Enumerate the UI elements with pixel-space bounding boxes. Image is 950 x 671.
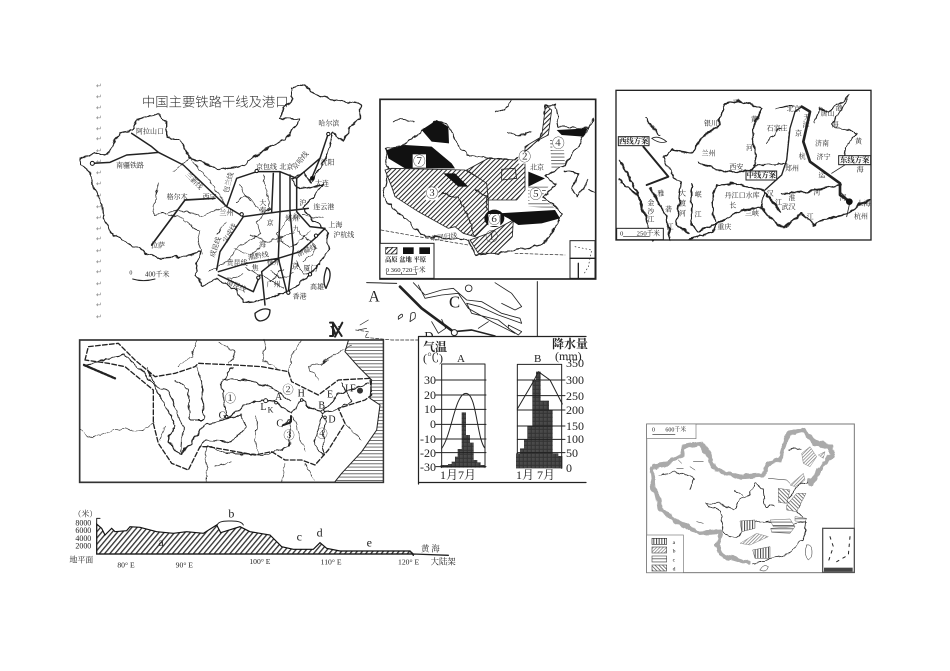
panel: China crop regions map [647,424,854,573]
Hanjiang bold line [84,365,115,378]
railway and port labels: 徐 [293,211,300,220]
place labels: 杭 [799,151,806,160]
railway and port labels: 大连 [315,179,329,188]
railway and port labels: 大 [259,198,266,207]
place labels: 河 [746,143,753,152]
letter C: C [449,292,460,311]
month labels: 1月 [516,468,534,482]
railway and port labels: 浙赣线 [295,241,318,258]
paragraph marks column: ↵ [96,192,102,200]
place labels: 岷 [695,190,702,199]
scale box: 250千米 [637,229,660,238]
place labels: 江 [695,210,702,219]
place labels: 江 [667,222,674,231]
inset South China Sea [823,528,854,572]
railway and port labels: 阿拉山口 [136,127,164,136]
terrain letters: c [297,530,302,544]
railway and port labels: 高雄 [310,282,324,291]
paragraph marks column: ↵ [96,125,102,133]
sea and shelf labels: 黄 海 [421,544,440,554]
temperature axis title: (℃) [423,351,443,365]
paragraph marks column: ↵ [96,235,102,243]
temperature tick labels: 10 [424,402,436,416]
railway and port labels: 宝成线 [221,222,239,244]
railway and port labels: 兰州 [219,208,233,217]
eastern route [802,107,850,202]
scale bar: 0 [129,270,132,276]
inset South China Sea [570,241,595,278]
railway and port labels: 400千米 [145,269,169,278]
place labels: 长 [729,202,736,210]
paragraph marks column: ↵ [96,291,102,299]
railway and port labels: 厦门 [303,263,317,272]
month labels: 1月 [440,468,458,482]
scale box: 0 [652,428,655,434]
temperature tick labels [420,373,436,474]
sea and shelf labels: 大陆架 [431,557,456,567]
railway and port labels: 湘黔线 [247,249,269,262]
place labels: 兰州 [702,149,716,158]
axis labels: 2000 [75,542,91,551]
railway and port labels: 沪杭线 [333,230,354,239]
country border gray band [652,430,832,563]
place labels: 津 [803,120,810,129]
place labels: 西安 [729,162,743,171]
place labels: 京 [795,129,802,138]
place labels: 海 [832,119,839,128]
chart B bars and curve [516,364,565,468]
temperature axis title [423,339,447,365]
scale bar [129,270,155,281]
railway lines [92,133,328,305]
place labels: 河 [839,193,846,202]
numbered region labels: ③ [426,187,439,201]
legend: c [673,558,676,564]
longitude labels: 100° E [249,557,271,566]
axis labels: 4000 [75,534,91,543]
terrain letters [158,506,372,550]
labels: D [328,415,336,426]
coastline and rivers [660,448,807,563]
terrain letters: b [228,506,234,520]
precipitation axis title: 降水量 [552,336,588,351]
panel: railway map [80,85,360,321]
place labels: 运 [818,172,826,180]
place labels: 江 [647,215,654,224]
paragraph marks column: ↵ [96,280,102,288]
China outline [80,85,360,302]
precipitation tick labels: 150 [566,419,584,433]
precipitation axis title: (mm) [555,349,582,363]
labels: F [350,384,356,395]
main river [83,355,368,453]
route label boxes: 西线方案 [619,137,649,146]
month labels: 7月 [458,468,476,482]
scale box [617,228,663,240]
title: 中国主要铁路干线及港口 [142,94,289,109]
labels [219,384,356,430]
paragraph marks column: ↵ [96,93,102,101]
place labels [647,103,871,231]
legend box: 0 360 720千米 [386,265,426,274]
railway and port labels: 南疆铁路 [116,161,144,170]
railway and port labels: 武 [277,235,284,244]
scale box [647,424,696,439]
railway and port labels: 九 [293,224,300,233]
axis labels: 地平面 [69,555,93,565]
railway and port labels: 沈阳 [321,157,335,166]
longitude labels [117,557,419,569]
longitude labels: 90° E [176,560,193,569]
legend: d [673,567,676,573]
precipitation tick labels: 200 [566,403,584,417]
paragraph marks column: ↵ [96,247,102,255]
tropic of cancer [381,230,565,255]
symbol V: V [330,324,341,341]
paragraph marks column: ↵ [96,214,102,222]
paragraph marks column: ↵ [96,104,102,112]
railway and port labels: 沪 [299,198,306,207]
place labels: 金 [647,198,654,207]
legend [647,535,683,573]
letter D: D [424,330,433,344]
region and place labels: 北京 [530,162,544,171]
precipitation axis title [552,336,588,363]
scale box: 0 [620,231,624,238]
labels: L [260,402,266,413]
numbered region labels: ④ [552,136,565,150]
railway and port labels: 格尔木 [167,192,188,201]
railway and port labels: 广州 [267,279,281,288]
paragraph marks column: ↵ [96,313,102,321]
place labels: 银川 [704,119,718,128]
legend box: 高原 盆地 平原 [385,254,427,263]
chart A bars and curve [436,364,486,468]
precipitation tick labels: 50 [566,446,578,460]
sea level line [97,551,448,555]
numbered region labels [413,136,565,244]
railway and port labels: 北京 [279,162,293,171]
paragraph marks column: ↵ [96,203,102,211]
place labels: 汉 [767,189,774,198]
temperature tick labels: -30 [420,460,436,474]
temperature tick labels: -20 [420,446,436,460]
place labels: 河 [813,187,820,196]
stations [90,132,330,294]
numbered region labels: ⑤ [529,188,542,202]
Qinghai-Tibet railway [152,198,215,245]
railway and port labels: 贵昆线 [227,258,248,267]
letter A: A [369,289,380,306]
precipitation tick labels: 100 [566,432,584,446]
precipitation tick labels: 350 [566,356,584,370]
labels: B [318,400,325,411]
panel: terrain regions map [380,99,596,279]
place labels: 丹江口水库 [725,191,760,200]
Yangtze and tributaries [618,160,870,240]
panel: Yangtze basin map: ② [282,383,294,396]
terrain profile [97,524,413,554]
paragraph marks column: ↵ [96,82,102,90]
bracket b [217,521,243,525]
precipitation tick labels: 250 [566,389,584,403]
paragraph marks column [96,82,102,321]
railway and port labels: 上海 [328,220,342,229]
numbered region labels: ⑦ [413,154,426,168]
place labels: 济宁 [817,152,831,161]
railway and port labels: 哈尔滨 [318,119,339,128]
place labels: 武汉 [782,202,796,211]
axis labels: 6000 [75,526,91,535]
temperature axis title: 气温 [423,339,447,354]
temperature tick labels: 20 [424,388,436,402]
lake Taihu [357,388,363,394]
labels: I [345,384,348,395]
panel: climate chart [418,336,588,484]
place labels: 江 [775,197,782,206]
scale box: 600千米 [665,426,686,434]
labels: K [268,406,274,415]
railway and port labels: 京 [267,218,274,227]
middle route [765,107,802,190]
labels: C [276,419,283,430]
chart B title: B [534,353,541,365]
provincial borders [82,341,362,482]
railway and port labels: 西宁 [203,192,217,201]
route label boxes [618,137,871,180]
place labels: 渤 [835,103,842,112]
China outline [383,105,593,255]
provincial boundaries and rivers [153,158,323,288]
precipitation tick labels: 300 [566,373,584,387]
place labels: 淮 [788,193,795,202]
railway and port labels: 郑州 [285,213,299,222]
paragraph marks column: ↵ [96,180,102,188]
paragraph marks column: ↵ [96,268,102,276]
basin boundary dashed line [85,343,372,470]
panel: terrain cross-section [69,506,456,569]
place labels: 沙 [647,206,655,215]
chart A title: A [457,353,465,365]
panel: Yangtze basin map: ④ [316,427,328,440]
railway and port labels: 包兰线 [221,171,235,194]
temperature tick labels: 0 [430,417,436,431]
railway and port labels: 南昆线 [225,277,248,294]
longitude labels: 80° E [117,560,135,569]
temperature tick labels: 30 [424,373,436,387]
place labels: 天 [803,114,810,122]
terrain letters: e [367,536,372,550]
axis labels: （米） [73,509,97,519]
labels: E [327,390,333,401]
paragraph marks column: ↵ [96,135,102,143]
railway and port labels: 拉萨 [151,241,165,250]
month labels [440,468,555,482]
place labels: 砻 [665,205,672,214]
interior plateau edges [442,190,487,237]
place labels: 黄 [751,115,759,124]
place labels: 唐山 [821,109,835,118]
panel: south-to-north water diversion map [616,90,871,240]
place labels: 黄 [855,137,863,146]
panel: Yangtze basin map: ① [225,392,236,405]
place labels: 石家庄 [767,123,788,132]
month labels: 7月 [537,468,555,482]
longitude labels: 120° E [398,558,419,567]
railway and port labels: 连云港 [313,202,334,211]
place labels: 大 [679,189,686,198]
railway and port labels: 成昆线 [207,236,223,258]
shaded crop areas [778,488,806,512]
temperature tick labels: -10 [420,432,436,446]
legend: a [673,540,676,546]
paragraph marks column: ↵ [96,147,102,155]
cities [225,399,326,419]
paragraph marks column: ↵ [96,169,102,177]
place labels: 渡 [679,199,686,208]
place labels: 重庆 [717,222,731,231]
western route [643,147,668,185]
paragraph marks column: ↵ [96,258,102,266]
railway and port labels [116,119,354,300]
railway and port labels: 京包线 [256,162,277,171]
route label boxes: 东线方案 [840,155,870,164]
place labels: 上海 [857,199,871,208]
place labels: 三峡 [745,209,759,218]
panel: Yangtze basin map: ③ [283,429,295,442]
labels: A [275,392,283,403]
railway and port labels: 香港 [293,291,307,300]
railway and port labels: 兰新线 [184,170,205,191]
panel: Yangtze basin map [80,340,383,482]
railway and port labels: 京哈线 [290,149,310,171]
route label boxes: 中线方案 [747,171,777,180]
precipitation tick labels [566,356,584,475]
place labels: 郑州 [785,163,799,172]
paragraph marks column: ↵ [96,114,102,122]
precipitation tick labels: 0 [566,461,572,475]
height axis [97,518,100,554]
axis labels [69,509,97,565]
Hainan and Taiwan islands [255,268,330,321]
place labels: 江 [807,212,814,221]
panel: terrain regions map: 北回归线 [430,230,458,243]
numbered region labels: ① [485,230,498,244]
sea and shelf labels [421,544,456,567]
sea shading [335,341,383,482]
railway and port labels: 海 [259,239,266,248]
legend box [380,243,434,278]
place labels: 北京 [787,104,801,113]
tributaries [147,367,352,455]
place labels: 杭州 [854,211,868,220]
panel: fragment map with labels A and C [330,282,537,344]
Yellow River [663,100,762,172]
place labels: 雅 [657,189,664,198]
place labels: 海 [857,165,864,174]
numbered region labels: ② [518,150,531,164]
labels: G [219,410,226,421]
basin and plain regions [387,119,592,227]
railway and port labels: 焦 [252,263,260,272]
plateau regions [385,105,552,253]
terrain letters: a [158,535,164,549]
railway and port labels: 秦 [259,205,266,214]
longitude labels: 110° E [321,558,342,567]
place labels: 河 [679,209,686,218]
legend: b [673,549,676,555]
place labels: 济南 [815,139,829,148]
paragraph marks column: ↵ [96,158,102,166]
railway and port labels: 株州 [267,257,281,266]
sea coast and neighbours [395,102,595,197]
paragraph marks column: ↵ [96,301,102,309]
terrain letters: d [317,526,323,540]
paragraph marks column: ↵ [96,225,102,233]
labels: H [298,389,305,400]
axis labels: 8000 [75,518,91,527]
railway and port labels: 京 [292,261,299,270]
numbered region labels: ⑥ [488,212,501,226]
